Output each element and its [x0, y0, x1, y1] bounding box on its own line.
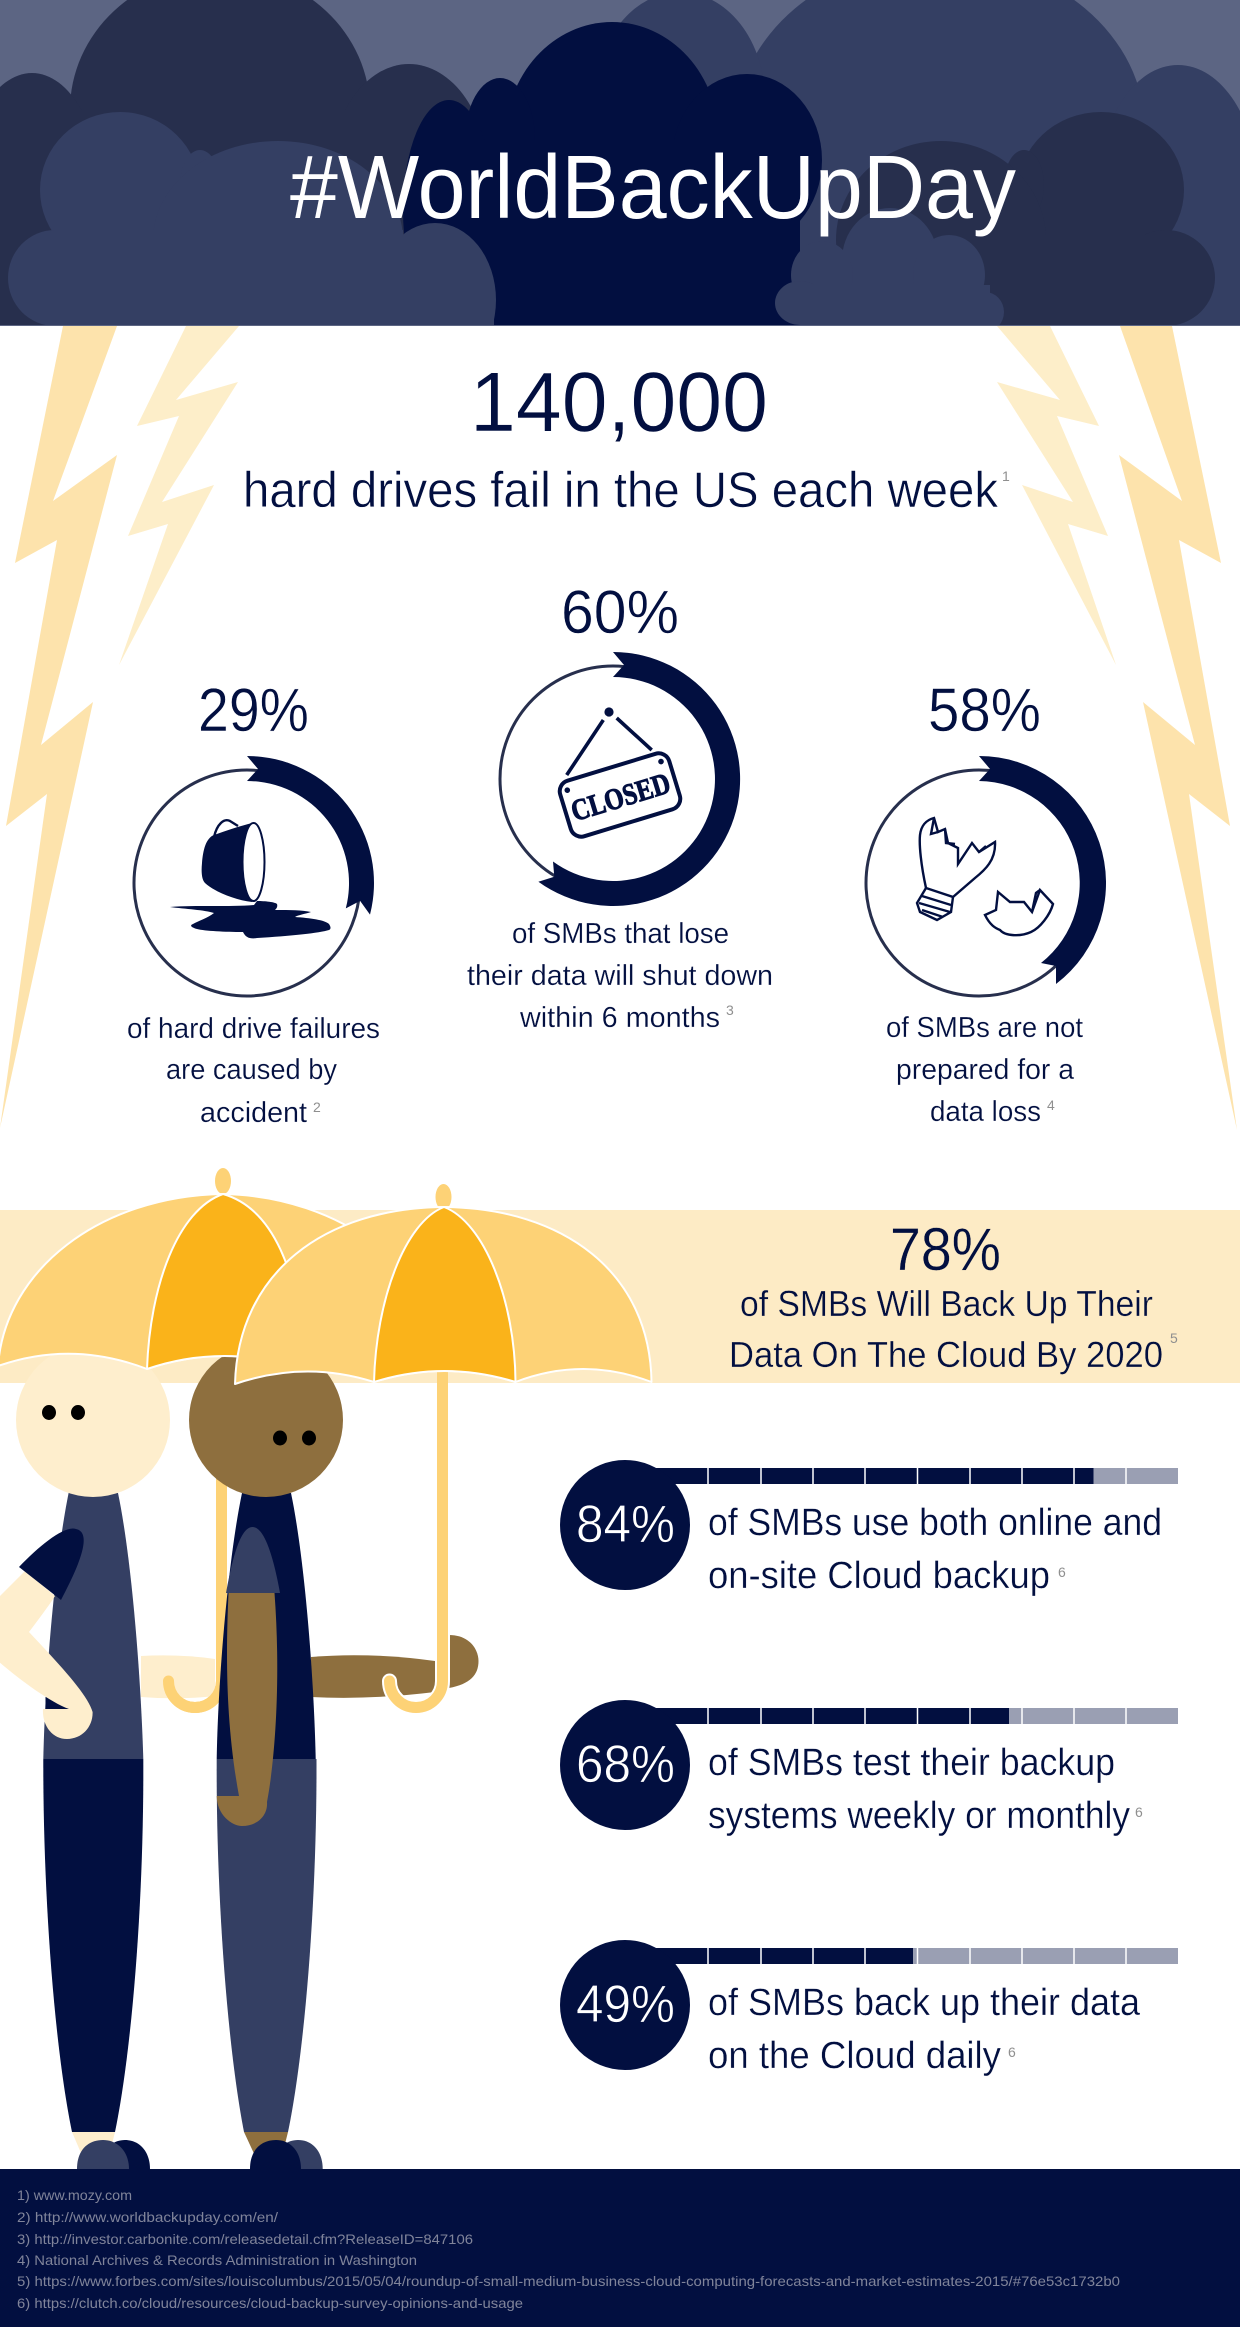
source list: 3) http://investor.carbonite.com/releasedetail.cfm?ReleaseID=847106 [17, 2231, 473, 2247]
person right: near arm [217, 1527, 280, 1826]
ankle [244, 2132, 288, 2153]
trousers [43, 1759, 143, 2132]
value: 60% [561, 578, 679, 646]
right umbrella pole and handle [390, 1372, 442, 1708]
stat row: 68% [560, 1700, 1178, 1837]
source list: 2) http://www.worldbackupday.com/en/ [17, 2209, 278, 2225]
caption: of SMBs that lose [512, 918, 729, 950]
person left: near arm [0, 1528, 93, 1739]
icon: lightning bolt inner left [119, 326, 239, 665]
icon: closed sign: CLOSED [567, 767, 674, 828]
footnote mark: 6 [1135, 1804, 1143, 1820]
headline stat: 140,000 [243, 355, 1010, 518]
footnote mark: 1 [1002, 468, 1010, 484]
value: 78% [890, 1216, 1001, 1283]
cloud: dark front right [836, 112, 1215, 339]
footnote mark: 6 [1008, 2044, 1016, 2060]
caption: 3 [726, 1002, 734, 1018]
icon: spilled cup [170, 820, 330, 938]
source list [17, 2187, 1120, 2311]
cloud: mid-blue back right [595, 0, 1240, 325]
shoes [114, 2140, 150, 2169]
badge value: 68% [576, 1735, 675, 1794]
person left: far arm [141, 1655, 215, 1698]
stat row: 68%: systems weekly or monthly [708, 1795, 1130, 1837]
caption: of SMBs use both online and [708, 1502, 1162, 1544]
person right: hand [449, 1635, 478, 1688]
icon: lightning bolt far right [1119, 326, 1237, 1130]
stat row: 49% [560, 1940, 1178, 2077]
shirt [217, 1493, 316, 1759]
progress arc [247, 756, 374, 915]
ankle [72, 2132, 115, 2152]
stat row: 84%: on-site Cloud backup [708, 1555, 1050, 1597]
panel: storm cloud header [0, 0, 1240, 326]
icon: lightning bolt far left [0, 326, 117, 1128]
caption: prepared for a [896, 1054, 1075, 1086]
value: 58% [928, 676, 1041, 744]
ring [134, 770, 360, 996]
banner: 78% cloud backup [0, 1210, 1240, 1383]
progress bar [655, 1948, 1178, 1964]
caption [467, 918, 773, 1034]
footnote mark: 6 [1058, 1564, 1066, 1580]
caption: of SMBs test their backup [708, 1742, 1115, 1784]
stat panel: 60% shut down [467, 578, 773, 1034]
source list: 4) National Archives & Records Administration in Washington [17, 2252, 417, 2268]
value: 29% [198, 676, 309, 744]
stat row: 84% [560, 1460, 1178, 1597]
badge [560, 1940, 690, 2070]
stat row: 49%: on the Cloud daily [708, 2035, 1001, 2077]
panel: footer sources [0, 2169, 1240, 2327]
cloud: navy centre [403, 22, 822, 325]
title: #WorldBackUpDay [290, 138, 1016, 238]
caption: within 6 months [519, 1002, 720, 1034]
icon: closed sign [557, 707, 683, 839]
shoes [287, 2140, 323, 2169]
ring [500, 666, 726, 892]
caption: are caused by [166, 1054, 337, 1086]
banner text: 78% of SMBs [729, 1216, 1178, 1375]
source list: 1) www.mozy.com [17, 2187, 132, 2203]
caption [886, 1012, 1083, 1128]
caption: hard drives fail in the US each week [243, 462, 999, 518]
shirt [43, 1493, 143, 1759]
icon: lightning bolt inner right [997, 326, 1116, 665]
progress bar [655, 1468, 1178, 1484]
caption [127, 1013, 380, 1129]
source list: 6) https://clutch.co/cloud/resources/cloud-backup-survey-opinions-and-usage [17, 2295, 523, 2311]
progress bar [655, 1708, 1178, 1724]
stat panel: 29% accident [127, 676, 380, 1129]
source list: 5) https://www.forbes.com/sites/louiscolumbus/2015/05/04/roundup-of-small-medium-business-cloud-computing-forecasts-and-market-estimates-2015/#76e53c1732b0 [17, 2273, 1120, 2289]
number: 140,000 [470, 355, 768, 449]
caption: 2 [313, 1099, 321, 1115]
caption: data loss [930, 1096, 1041, 1128]
badge value: 84% [576, 1495, 675, 1554]
icon: broken light bulb [917, 818, 1053, 935]
left umbrella canopy [0, 1168, 346, 1370]
badge [560, 1460, 690, 1590]
left umbrella pole and handle [168, 1478, 227, 1713]
person left: body [43, 1493, 150, 2169]
person right: outstretched arm [311, 1655, 435, 1698]
person right: head [189, 1343, 343, 1497]
caption: of hard drive failures [127, 1013, 380, 1045]
cloud: blue front left [8, 112, 496, 325]
cloud: dark back left [0, 0, 489, 327]
caption: of SMBs Will Back Up Their [740, 1283, 1153, 1324]
caption: of SMBs back up their data [708, 1982, 1141, 2024]
right umbrella canopy [235, 1184, 652, 1384]
badge [560, 1700, 690, 1830]
illustration: two people under umbrellas [0, 1168, 652, 2169]
stat panel: 58% not prepared [866, 676, 1106, 1128]
caption: accident [200, 1097, 307, 1129]
progress arc [538, 652, 740, 906]
banner text: 78% of SMBs: Data On The Cloud By 2020 [729, 1334, 1163, 1375]
ring [866, 770, 1092, 996]
caption: of SMBs are not [886, 1012, 1083, 1044]
trousers [217, 1759, 317, 2132]
person right: body [217, 1493, 323, 2169]
footnote mark: 5 [1170, 1330, 1178, 1346]
caption: 4 [1047, 1097, 1055, 1113]
caption: their data will shut down [467, 960, 773, 992]
person left: head [16, 1383, 170, 1497]
progress arc [979, 756, 1106, 984]
cloud: small front centre-right [775, 208, 1004, 332]
badge value: 49% [576, 1975, 675, 2034]
